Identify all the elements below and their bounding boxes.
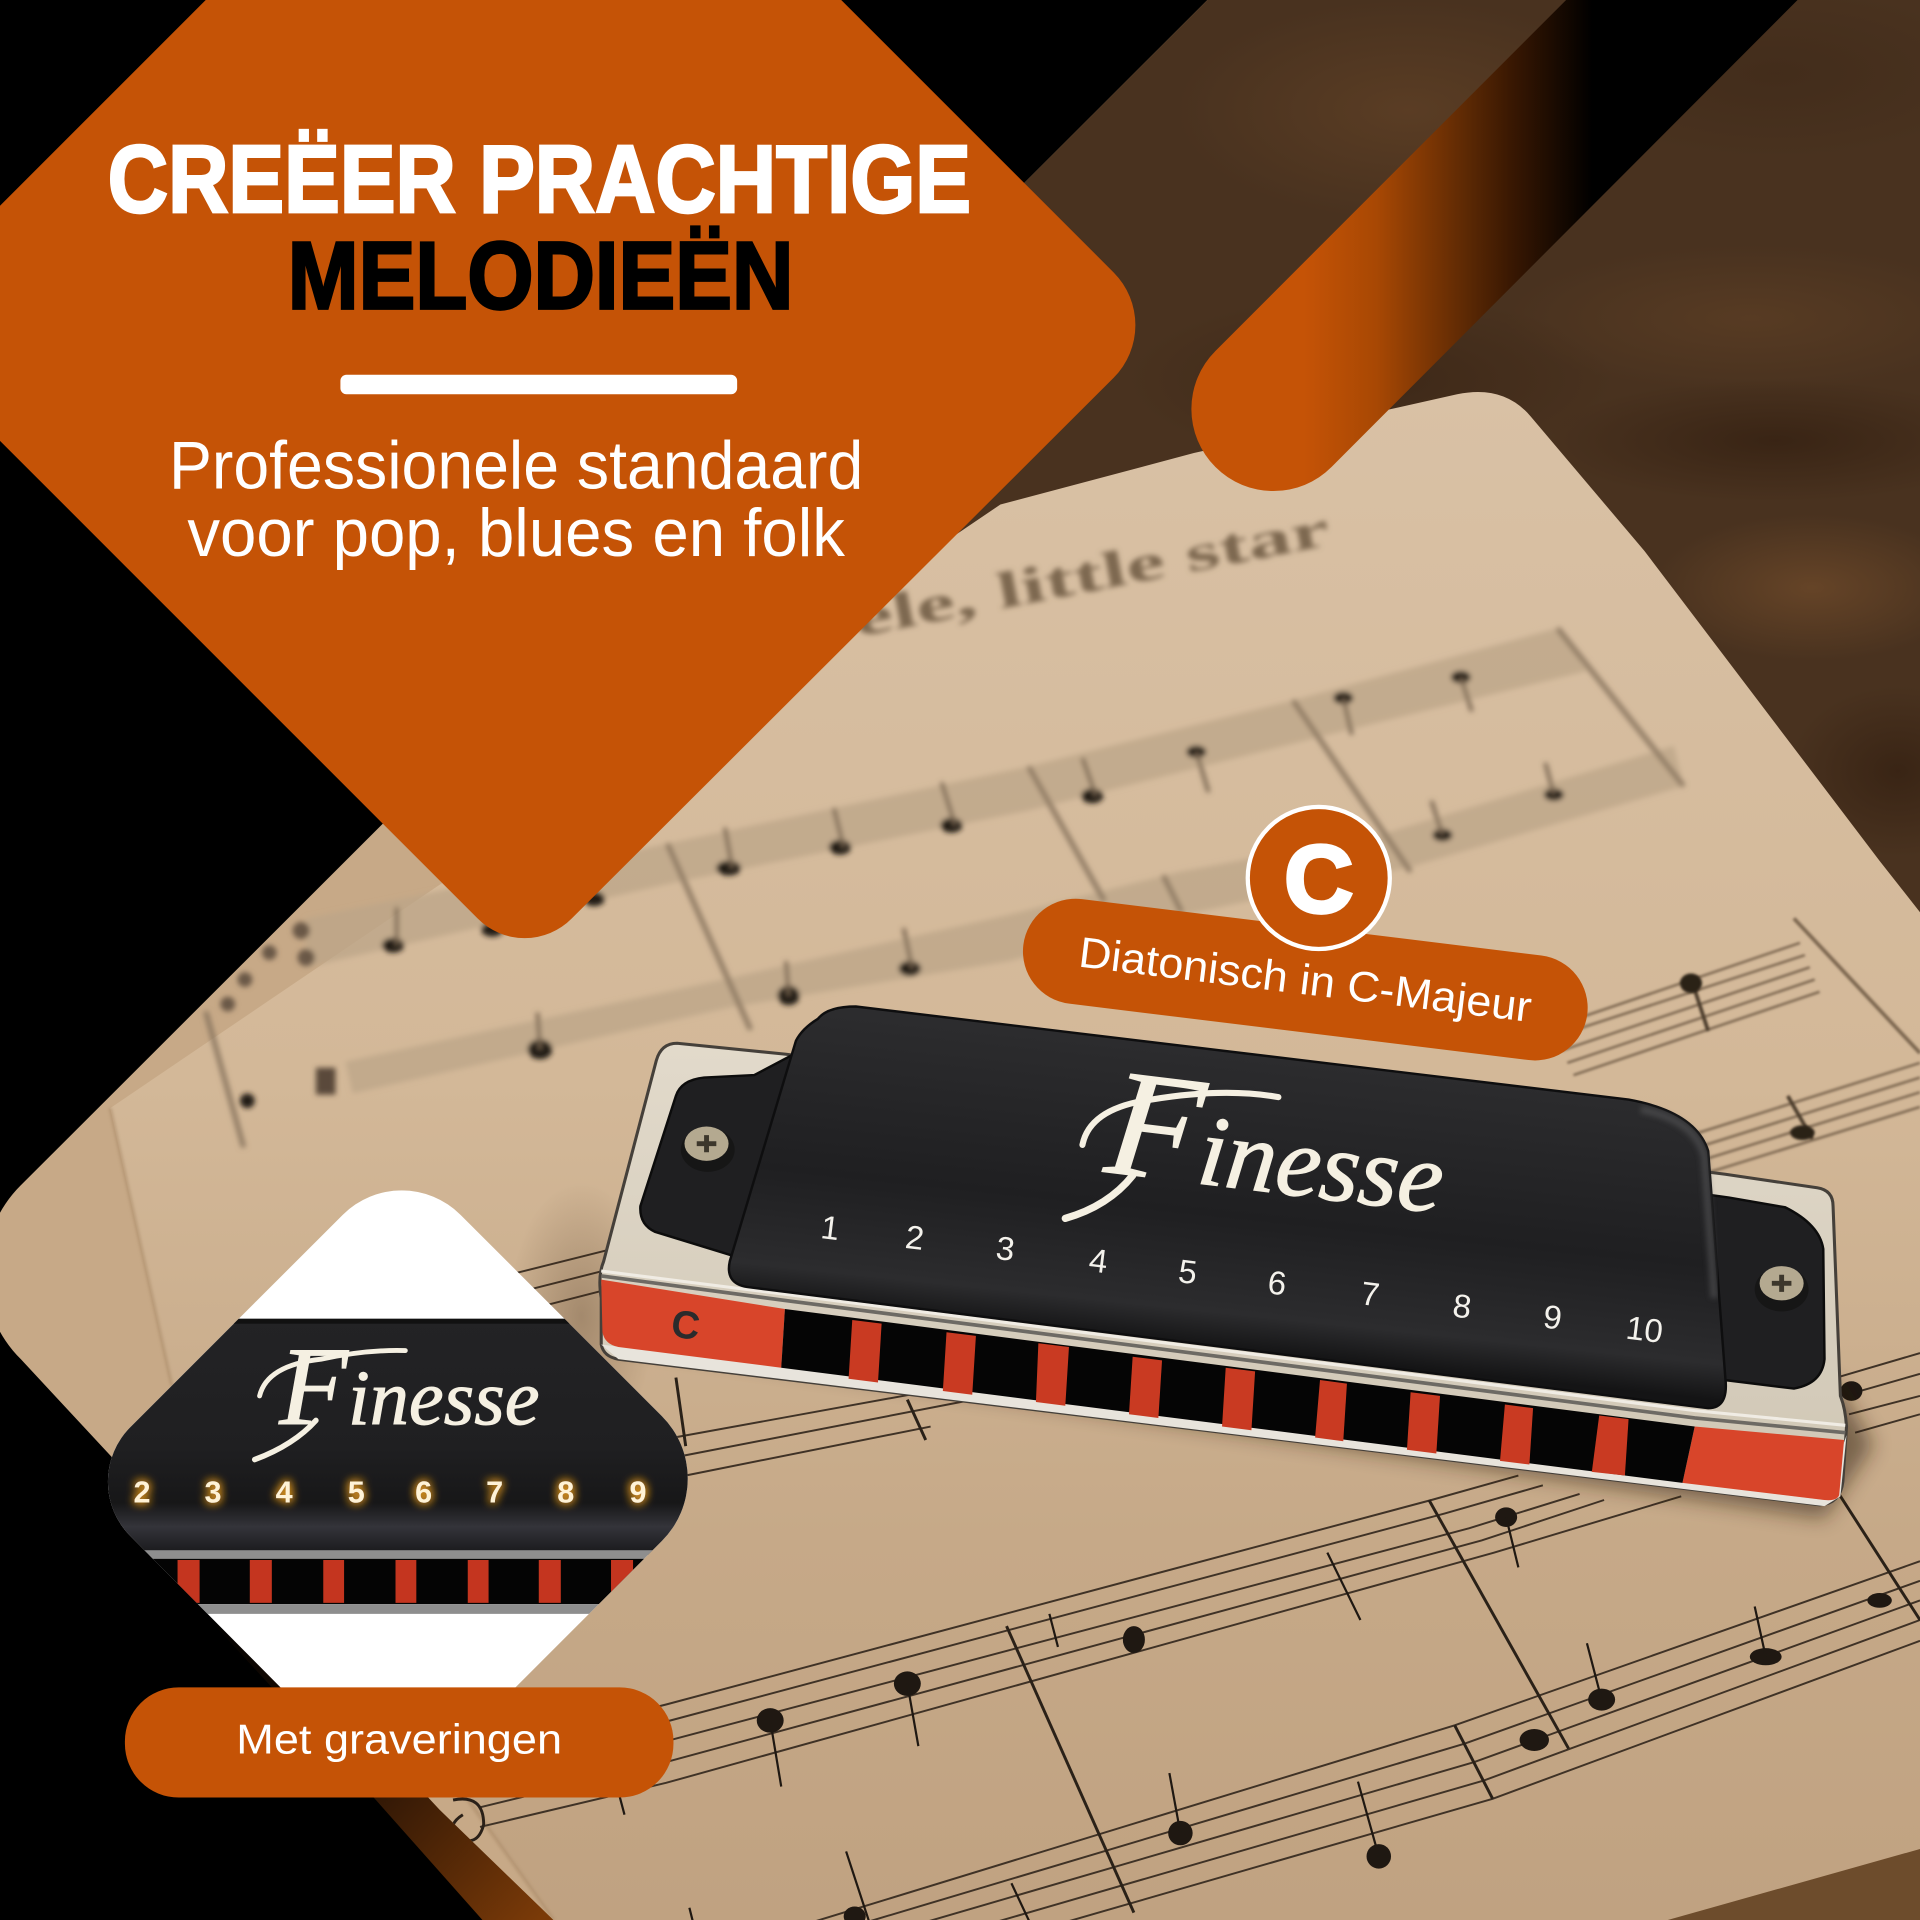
cover plate <box>729 1007 1726 1408</box>
harmonica plate <box>600 1043 1847 1505</box>
callout: met graveringen <box>125 1687 673 1798</box>
hole numbers: 7 <box>1359 1275 1382 1314</box>
hole numbers: 4 <box>1087 1242 1110 1281</box>
callout: met graveringen: Met graveringen <box>236 1715 562 1762</box>
hole numbers: 2 <box>903 1219 926 1258</box>
title: CREËER PRACHTIGE <box>108 127 971 233</box>
dark orange diagonal strip lower left <box>184 1592 563 1920</box>
hole numbers: 10 <box>1624 1310 1665 1351</box>
left ear of cover <box>640 1053 808 1256</box>
bar lines lower sheet <box>676 1378 1920 1913</box>
blurred staves upper sheet <box>206 500 1684 1147</box>
panel: orange headline diamond <box>0 0 1135 938</box>
callout: diatonic in C major <box>1017 807 1594 1066</box>
glowing hole numbers: 7 <box>486 1475 503 1509</box>
hole numbers: 1 <box>819 1209 842 1248</box>
mid-right staves <box>1549 918 1920 1188</box>
title <box>108 127 971 330</box>
hole numbers: 8 <box>1451 1288 1473 1327</box>
callout pill: Diatonisch in C-Majeur <box>1076 929 1534 1032</box>
glowing hole numbers: 6 <box>415 1475 432 1509</box>
glowing hole numbers: 2 <box>134 1475 151 1509</box>
book edge <box>1668 1849 1920 1920</box>
notes mid-right <box>1680 973 1815 1140</box>
glowing hole numbers: 8 <box>557 1475 574 1509</box>
glowing hole numbers <box>134 1475 646 1509</box>
inset silver edge <box>144 1550 652 1559</box>
inset cover band <box>108 1318 688 1555</box>
screw left <box>681 1127 735 1172</box>
bottom silver trim <box>601 1344 1847 1506</box>
key badge C <box>1248 807 1390 949</box>
red side left <box>601 1280 785 1368</box>
panel: engraving detail inset <box>108 1190 688 1688</box>
inset logo Finesse <box>252 1348 538 1462</box>
hole numbers: 9 <box>1541 1299 1564 1338</box>
right ear of cover <box>1702 1194 1824 1389</box>
music sheet <box>110 392 1920 1920</box>
treble clef fragment <box>453 1799 484 1841</box>
red comb teeth <box>849 1320 1629 1476</box>
sharp notes <box>757 1381 1892 1920</box>
left page shading <box>110 1108 553 1920</box>
harmonica main product <box>600 1007 1873 1518</box>
decorative diagonal orange stripe top right <box>1191 0 1798 491</box>
red side right <box>1682 1427 1844 1500</box>
glowing hole numbers: 3 <box>205 1475 222 1509</box>
glowing hole numbers: 5 <box>348 1475 365 1509</box>
hole numbers: 5 <box>1176 1253 1199 1292</box>
key letter C: C <box>669 1303 702 1349</box>
hole numbers <box>819 1209 1665 1351</box>
callout pill <box>1017 893 1594 1066</box>
inset comb slot <box>152 1558 644 1604</box>
subtitle <box>169 429 863 571</box>
sharp staves lower sheet <box>480 1249 1920 1920</box>
comb holes <box>781 1309 1695 1483</box>
glowing hole numbers: 4 <box>276 1475 293 1509</box>
screw right <box>1755 1266 1809 1311</box>
inset comb teeth <box>178 1560 633 1603</box>
glowing hole numbers: 9 <box>629 1475 646 1509</box>
key badge C: C <box>1284 827 1353 933</box>
hole numbers: 3 <box>994 1230 1017 1269</box>
divider bar <box>340 375 737 394</box>
subtitle: voor pop, blues en folk <box>187 496 845 571</box>
title: MELODIEËN <box>288 224 793 330</box>
subtitle: Professionele standaard <box>169 429 863 504</box>
blurred staves upper sheet: ele, little star <box>849 500 1334 649</box>
hole numbers: 6 <box>1266 1264 1288 1303</box>
logo Finesse: Finesse <box>1098 1037 1456 1247</box>
inset logo Finesse: Finesse <box>278 1325 539 1449</box>
